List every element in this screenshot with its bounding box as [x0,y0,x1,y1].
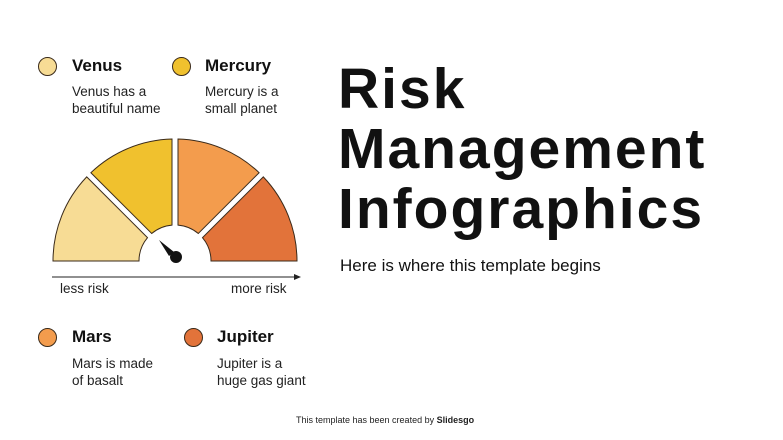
icon: Mercury dot [172,57,191,76]
text: Venus description: Venus has a [72,84,146,99]
heading: Mercury: Mercury [205,56,271,75]
title: Infographics [338,177,704,241]
text: Venus description: beautiful name [72,101,161,116]
gauge segment: high [202,177,297,261]
heading: Mars: Mars [72,327,112,346]
legend: Mercury [172,56,279,116]
arrow: risk axis [52,274,301,280]
label: more risk: more risk [231,281,287,296]
label: less risk: less risk [60,281,109,296]
icon: Venus dot [38,57,57,76]
text: Mercury description [205,84,279,116]
legend: Jupiter [184,327,306,388]
gauge segment: medium-low [91,139,172,234]
title: Risk [338,57,466,121]
gauge chart [52,138,301,280]
text: Mars description: Mars is made [72,356,153,371]
icon: Mars dot [38,328,57,347]
legend: Mars [38,327,153,388]
text: Jupiter description: Jupiter is a [217,356,282,371]
title [338,57,706,241]
needle [159,240,182,263]
legend: Venus [38,56,161,116]
text: Jupiter description: huge gas giant [217,373,306,388]
text: Mars description: of basalt [72,373,123,388]
heading: Jupiter: Jupiter [217,327,274,346]
text: Jupiter description [217,356,306,388]
title: Management [338,117,706,181]
text: Mercury description: small planet [205,101,277,116]
footer: This template has been created by Slidesgo [296,415,474,425]
subtitle: Here is where this template begins [340,256,601,275]
text: Mercury description: Mercury is a [205,84,279,99]
gauge segment: low [53,177,148,261]
text: Mars description [72,356,153,388]
icon: Jupiter dot [184,328,203,347]
heading: Venus: Venus [72,56,122,75]
gauge segment: medium-high [178,139,259,234]
text: Venus description [72,84,161,116]
